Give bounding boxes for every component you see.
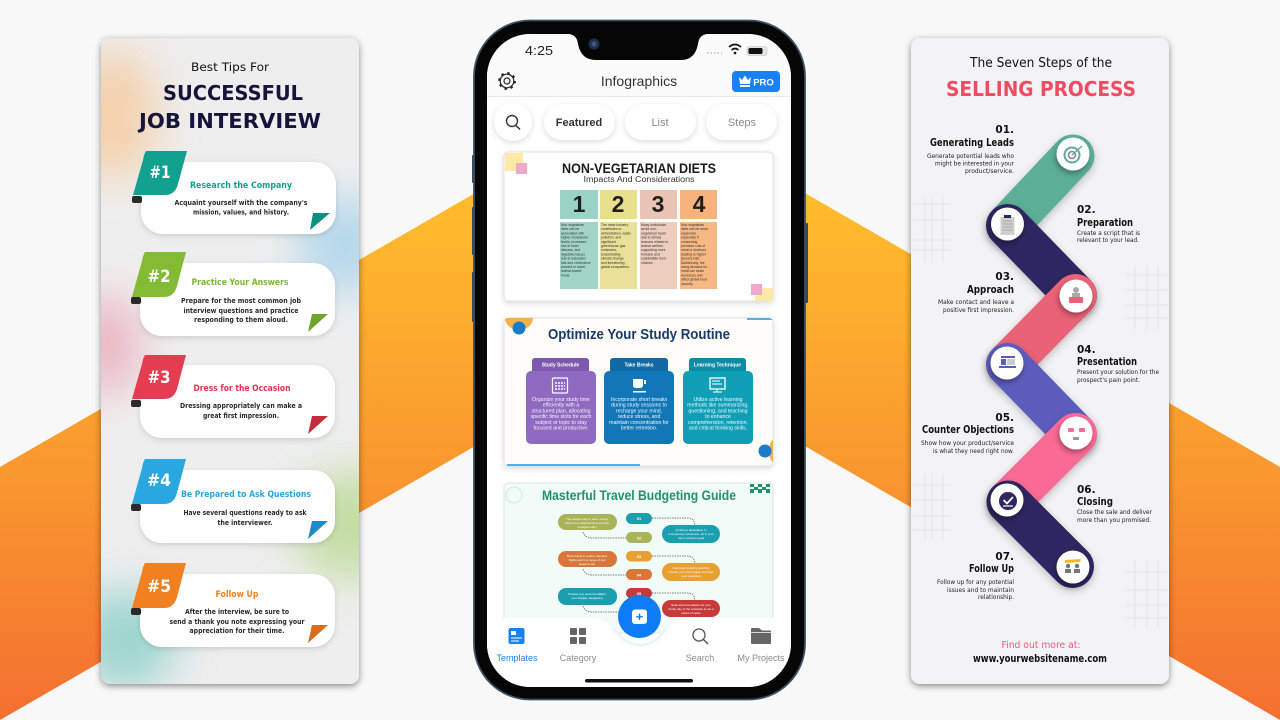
thumbnail: non-vegetarian diets: diets can be: [561, 227, 579, 231]
thumbnail: non-vegetarian diets: Additionally, the: [681, 261, 705, 265]
thumbnail: non-vegetarian diets: sustainable food: [641, 257, 666, 261]
tip 2 card: responding to them aloud.: [194, 316, 288, 324]
column: learning technique: Utilize active learning: [693, 397, 743, 403]
button: PRO: PRO: [753, 78, 774, 88]
step 07 text: [937, 551, 1014, 601]
step 01 text: [927, 124, 1015, 175]
thumbnail: travel budgeting guide: 03: [637, 554, 642, 559]
status bar and header: Infographics: [601, 73, 677, 89]
column: learning technique: questioning, and teaching: [688, 408, 748, 414]
tip 4 card: [131, 459, 335, 543]
tip 4 card: #4: [147, 471, 171, 491]
column: study schedule: Study Schedule: [542, 362, 579, 368]
step 01 text: might be interested in your: [935, 162, 1015, 168]
icon: conversation: [1060, 416, 1092, 450]
panel: selling process poster: [911, 38, 1169, 684]
step 03 text: Make contact and leave a: [938, 300, 1014, 306]
thumbnail: non-vegetarian diets: affect global food: [681, 278, 707, 282]
thumbnail: travel budgeting guide: transport early: [577, 525, 597, 529]
step 03 text: [938, 271, 1014, 314]
step 01 text: 01.: [995, 124, 1014, 136]
thumbnail: travel budgeting guide: Seek accommodation for your: [671, 603, 711, 607]
thumbnail: non-vegetarian diets: deforestation, water: [601, 231, 632, 235]
icon: people with banner: [1056, 550, 1090, 584]
tip 1 card: mission, values, and history.: [193, 208, 289, 216]
thumbnail: non-vegetarian diets: Many individuals: [641, 223, 666, 227]
thumbnail: non-vegetarian diets: Non-vegetarian: [561, 223, 584, 227]
heading: selling process: [946, 56, 1136, 101]
thumbnail: non-vegetarian diets: higher cholesterol: [561, 236, 588, 240]
thumbnail: travel budgeting guide: 02: [637, 536, 642, 540]
thumbnail: non-vegetarian diets: digestive issues: [561, 252, 585, 256]
thumbnail: travel budgeting guide: flights and in a range of low: [569, 558, 606, 562]
thumbnail: non-vegetarian diets: 4: [693, 191, 706, 217]
thumbnail: non-vegetarian diets: pollution, and: [601, 236, 621, 240]
icon: target: [1056, 138, 1090, 170]
step 01 text: Generating Leads: [930, 137, 1014, 149]
column: study schedule: [526, 358, 596, 444]
icon: speaker at podium: [1060, 280, 1092, 312]
tip 2 card: Prepare for the most common job: [181, 297, 301, 305]
tip 3 card: Dress for the Occasion: [194, 384, 290, 394]
thumbnail: non-vegetarian diets: exacerbating: [601, 252, 621, 256]
icon: my projects: [737, 628, 785, 663]
thumbnail: non-vegetarian diets: global ecosystems.: [601, 265, 630, 269]
thumbnail: non-vegetarian diets: reasons related to: [641, 240, 668, 244]
thumbnail: optimize your study routine: Optimize Your Study Routine: [548, 326, 730, 343]
heading: best tips: [137, 60, 321, 133]
thumbnail: non-vegetarian diets: present in some: [561, 265, 585, 269]
thumbnail: non-vegetarian diets: and threatening: [601, 261, 625, 265]
heading: best tips: SUCCESSFUL: [163, 81, 303, 105]
column: study schedule: specific time slots for each: [531, 414, 592, 420]
thumbnail: travel budgeting guide: family day of the schedule to set a: [668, 607, 714, 611]
step 02 text: 02.: [1077, 204, 1096, 216]
thumbnail: travel budgeting guide: your spending: [682, 574, 701, 578]
column: study schedule: efficiently with a: [543, 403, 579, 409]
step 02 text: relevant to your lead.: [1077, 238, 1139, 244]
thumbnail: non-vegetarian diets: humane and: [641, 252, 660, 256]
column: take breaks: during study sessions to: [611, 403, 667, 409]
column: learning technique: methods like summarizing,: [687, 403, 749, 409]
button: add new: [618, 595, 661, 638]
thumbnail: non-vegetarian diets: vegetarian foods: [641, 231, 666, 235]
tip 1 card: Acquaint yourself with the company's: [174, 199, 308, 207]
thumbnail: travel budgeting guide: 06: [637, 610, 642, 615]
thumbnail: non-vegetarian diets: supporting more: [641, 248, 666, 252]
thumbnail: non-vegetarian diets: animal-based: [561, 269, 581, 273]
tip 3 card: Dressing appropriately can make a: [180, 402, 302, 410]
panel: smartphone mockup: [472, 20, 808, 700]
tip 5 card: [131, 563, 335, 647]
thumbnail: non-vegetarian diets: grocery bills.: [681, 257, 700, 261]
thumbnail: non-vegetarian diets: premium cuts of: [681, 244, 705, 248]
thumbnail: non-vegetarian diets: avoid non-: [641, 227, 657, 231]
step 03 text: 03.: [995, 271, 1014, 283]
tip 1 card: #1: [150, 163, 170, 183]
thumbnail: travel budgeting guide: 04: [637, 572, 642, 578]
thumbnail: non-vegetarian diets: risk of heart: [561, 244, 579, 248]
thumbnail: non-vegetarian diets: resources and: [681, 273, 703, 277]
step 06 text: 06.: [1077, 484, 1096, 496]
tip 3 card: #3: [148, 368, 170, 388]
column: take breaks: recharge your mind,: [616, 408, 662, 414]
thumbnail: non-vegetarian diets: especially if: [681, 236, 699, 240]
thumbnail: optimize your study routine: [504, 306, 781, 466]
icon: my projects: My Projects: [737, 653, 785, 663]
step 04 text: Presentation: [1077, 356, 1137, 368]
thumbnail: non-vegetarian diets: NON-VEGETARIAN DIETS: [562, 161, 716, 176]
icon: settings gear: [499, 73, 515, 89]
step 02 text: [1077, 204, 1140, 244]
step 06 text: more than you promised.: [1077, 518, 1151, 524]
column: learning technique: Learning Technique: [694, 362, 741, 368]
thumbnail: non-vegetarian diets: Impacts And Considerations: [584, 175, 694, 184]
thumbnail: non-vegetarian diets: expensive,: [681, 231, 697, 235]
tip 5 card: #5: [147, 577, 171, 597]
icon: search: [686, 629, 714, 663]
heading: selling process: SELLING PROCESS: [946, 77, 1136, 101]
column: learning technique: comprehension, retention,: [688, 420, 748, 426]
thumbnail: non-vegetarian diets: choices.: [641, 261, 653, 265]
tip 4 card: the interviewer.: [218, 519, 272, 527]
thumbnail: non-vegetarian diets: meat can strain: [681, 269, 704, 273]
thumbnail: non-vegetarian diets: 1: [573, 191, 586, 217]
filter tabs: Steps: [728, 117, 757, 129]
thumbnail: non-vegetarian diets: Non-vegetarian: [681, 223, 704, 227]
step 04 text: prospect's pain point.: [1077, 378, 1140, 384]
footer: website call to action: Find out more at:: [1002, 640, 1080, 651]
thumbnail: travel budgeting guide: 05: [637, 591, 642, 596]
thumbnail: non-vegetarian diets: leading to higher: [681, 252, 707, 256]
column: take breaks: Incorporate short breaks: [611, 397, 668, 403]
tip 5 card: Follow Up: [216, 590, 258, 600]
thumbnail: non-vegetarian diets: due to saturated: [561, 257, 586, 261]
thumbnail: non-vegetarian diets: associated with: [561, 231, 584, 235]
thumbnail: non-vegetarian diets: levels, increased: [561, 240, 586, 244]
step 05 text: is what they need right now.: [933, 449, 1014, 455]
column: study schedule: subject or topic to stay: [535, 420, 587, 426]
thumbnail: travel budgeting guide: Choose any accommodation: [568, 592, 606, 596]
step 03 text: positive first impression.: [943, 308, 1014, 314]
panel: job interview tips poster: [96, 35, 364, 691]
thumbnail: non-vegetarian diets: contributes to: [601, 227, 621, 231]
tip 5 card: After the interview, be sure to: [185, 608, 289, 616]
step 05 text: Counter Objections: [922, 424, 1014, 436]
thumbnail: travel budgeting guide: 01: [637, 516, 642, 521]
thumbnail: non-vegetarian diets: climate change: [601, 257, 624, 261]
icon: category: [560, 628, 597, 663]
step 05 text: 05.: [995, 412, 1014, 424]
thumbnail: non-vegetarian diets: consuming: [681, 240, 698, 244]
filter tabs: List: [651, 117, 669, 129]
step 06 text: [1077, 484, 1153, 524]
heading: best tips: Best Tips For: [191, 60, 269, 74]
step 07 text: issues and to maintain: [947, 588, 1014, 594]
thumbnail: travel budgeting guide: The easiest way to save money: [566, 517, 609, 521]
column: learning technique: [683, 358, 753, 444]
icon: search: Search: [686, 653, 714, 663]
step 07 text: 07.: [995, 551, 1014, 563]
step 02 text: Create a script that is: [1077, 231, 1140, 237]
step 01 text: product/service.: [965, 169, 1014, 175]
column: study schedule: Organize your study time: [532, 397, 590, 403]
column: take breaks: Take Breaks: [624, 362, 654, 368]
thumbnail: non-vegetarian diets: security.: [681, 282, 693, 286]
status bar and header: [487, 33, 791, 97]
tip 3 card: great first impression.: [203, 412, 279, 420]
diagram: zigzag step capsules: [990, 138, 1092, 584]
step 05 text: [921, 412, 1014, 455]
heading: best tips: JOB INTERVIEW: [137, 109, 321, 133]
thumbnail: travel budgeting guide: Use local currency carefully: [673, 566, 710, 570]
status bar and header: 4:25: [525, 43, 553, 58]
tip 1 card: [132, 151, 336, 234]
thumbnail: non-vegetarian diets: 2: [612, 191, 624, 217]
step 01 text: Generate potential leads who: [927, 154, 1014, 160]
icon: category: Category: [560, 653, 597, 663]
tip 4 card: Be Prepared to Ask Questions: [181, 490, 311, 500]
tip 5 card: appreciation for their time.: [190, 627, 284, 635]
thumbnail: non-vegetarian diets: due to ethical: [641, 236, 661, 240]
heading: selling process: The Seven Steps of the: [969, 56, 1112, 71]
thumbnail: non-vegetarian diets: significant: [601, 240, 616, 244]
step 02 text: Preparation: [1077, 217, 1133, 229]
thumbnail: travel budgeting guide: [504, 483, 773, 633]
tip 2 card: #2: [148, 267, 170, 287]
icon: clipboard: [991, 208, 1024, 240]
thumbnail: non-vegetarian diets: rising demand for: [681, 265, 708, 269]
thumbnail: travel budgeting guide: seasons too: [579, 562, 595, 566]
thumbnail: non-vegetarian diets: animal welfare,: [641, 244, 664, 248]
thumbnail: non-vegetarian diets: diets can be more: [681, 227, 708, 231]
column: learning technique: to enhance: [705, 414, 731, 420]
footer: website call to action: [973, 640, 1107, 665]
tip 2 card: [131, 252, 335, 336]
step 04 text: Present your solution for the: [1077, 370, 1159, 376]
thumbnail: travel budgeting guide: monitor your card usage and save: [668, 570, 714, 574]
column: take breaks: [604, 358, 674, 444]
step 07 text: relationship.: [978, 595, 1014, 601]
step 04 text: [1077, 344, 1159, 384]
thumbnail: travel budgeting guide: a temporary movement, as in your: [668, 532, 714, 536]
filter tabs: [494, 103, 777, 141]
button: PRO: [732, 71, 780, 92]
thumbnail: travel budgeting guide: use a common goal: [678, 536, 704, 540]
step 05 text: Show how your product/service: [921, 441, 1014, 447]
icon: presentation screen: [990, 346, 1024, 380]
tip 5 card: send a thank you note expressing your: [170, 618, 305, 626]
thumbnail: non-vegetarian diets: greenhouse gas: [601, 244, 626, 248]
thumbnail: non-vegetarian diets: meat or seafood,: [681, 248, 707, 252]
step 07 text: Follow Up: [969, 563, 1014, 575]
thumbnail: travel budgeting guide: when on a national trip is to book: [565, 521, 609, 525]
thumbnail: non-vegetarian diets: disease, and: [561, 248, 580, 252]
step 06 text: Close the sale and deliver: [1077, 510, 1153, 516]
thumbnail: non-vegetarian diets: [504, 152, 773, 301]
column: study schedule: focused and productive.: [533, 426, 589, 432]
thumbnail: non-vegetarian diets: The meat industry: [601, 223, 628, 227]
thumbnail: non-vegetarian diets: emissions,: [601, 248, 617, 252]
icon: templates: Templates: [496, 653, 538, 663]
column: learning technique: and critical thinking skills.: [689, 426, 747, 432]
thumbnail: non-vegetarian diets: 3: [652, 191, 664, 217]
step 07 text: Follow up for any potential: [937, 580, 1014, 586]
decorative grids: [912, 197, 1168, 628]
thumbnail: travel budgeting guide: Finding a destination in: [676, 528, 707, 532]
filter tabs: Featured: [556, 117, 602, 129]
tip 2 card: interview questions and practice: [184, 307, 299, 315]
thumbnail: non-vegetarian diets: foods.: [561, 273, 570, 277]
thumbnail: travel budgeting guide: Masterful Travel Budgeting Guide: [542, 487, 736, 503]
thumbnail: travel budgeting guide: series of spots: [681, 611, 701, 615]
thumbnail: non-vegetarian diets: fats and cholesterol: [561, 261, 591, 265]
icon: templates: [496, 628, 538, 663]
column: take breaks: better retention.: [621, 426, 657, 432]
tip 1 card: Research the Company: [190, 181, 292, 191]
column: take breaks: maintain concentration for: [609, 420, 669, 426]
thumbnail: travel budgeting guide: Book travel to reduce demand: [567, 554, 607, 558]
step 03 text: Approach: [967, 284, 1014, 296]
bottom navigation bar: [487, 618, 791, 690]
tip 2 card: Practice Your Answers: [192, 278, 288, 288]
column: take breaks: reduce stress, and: [618, 414, 660, 420]
column: study schedule: structured plan, allocating: [531, 408, 591, 414]
footer: website call to action: www.yourwebsitename.com: [973, 653, 1107, 665]
tip 3 card: [131, 355, 335, 438]
icon: checkmark badge: [990, 484, 1024, 516]
step 04 text: 04.: [1077, 344, 1096, 356]
step 06 text: Closing: [1077, 496, 1113, 508]
tip 4 card: Have several questions ready to ask: [184, 509, 307, 517]
thumbnail: travel budgeting guide: your budget, bargaining: [571, 596, 603, 600]
